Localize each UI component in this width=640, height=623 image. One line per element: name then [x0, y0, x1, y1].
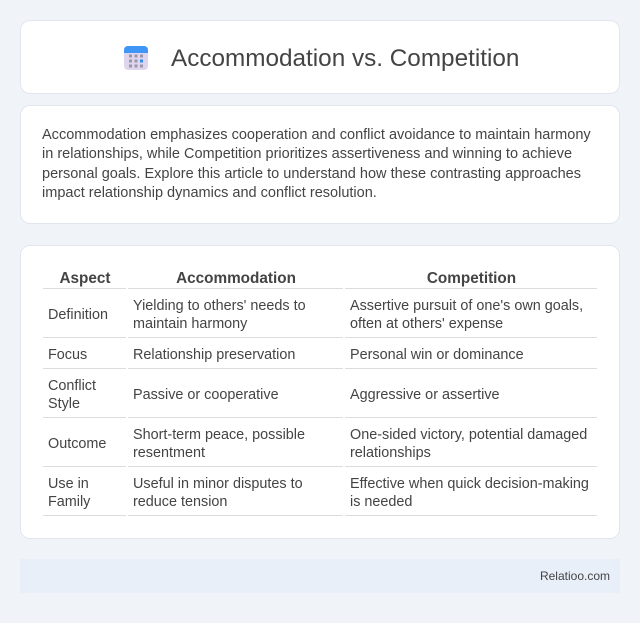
row: focus: [48, 347, 524, 363]
table header: Accommodation: [176, 270, 296, 287]
row: focus: Relationship preservation: [133, 347, 295, 363]
row: outcome: Short-term peace, possible: [133, 427, 305, 443]
row: use in family: Effective when quick decision-making: [350, 476, 589, 492]
panel: header: [20, 20, 620, 94]
footer brand: Relatioo.com: [540, 569, 610, 583]
row: outcome: One-sided victory, potential damaged: [350, 427, 587, 443]
intro text: personal goals. Explore this article to understand how these contrasting approaches: [42, 166, 581, 182]
row: outcome: resentment: [133, 445, 205, 461]
row: conflict style: Conflict: [48, 378, 96, 394]
intro text: in relationships, while Competition prioritizes assertiveness and winning to achieve: [42, 146, 572, 162]
icon: calendar: [124, 46, 148, 70]
row: definition: [48, 298, 583, 332]
table header: [59, 270, 516, 287]
row: use in family: [48, 476, 589, 510]
row: outcome: [48, 427, 587, 461]
intro text: [42, 127, 591, 201]
row: use in family: reduce tension: [133, 494, 227, 510]
row: definition: Assertive pursuit of one's own goals,: [350, 298, 583, 314]
row: conflict style: Passive or cooperative: [133, 387, 279, 403]
intro text: Accommodation emphasizes cooperation and conflict avoidance to maintain harmony: [42, 127, 591, 143]
row: conflict style: [48, 378, 500, 412]
row: outcome: Outcome: [48, 436, 106, 452]
row: definition: maintain harmony: [133, 316, 247, 332]
row: outcome: relationships: [350, 445, 431, 461]
row: use in family: Useful in minor disputes to: [133, 476, 303, 492]
panel: comparison table: [20, 245, 620, 539]
row: use in family: is needed: [350, 494, 412, 510]
table header: Competition: [427, 270, 516, 287]
footer bar: [20, 559, 620, 593]
intro text: impact relationship dynamics and conflict resolution.: [42, 185, 377, 201]
panel: intro: [20, 105, 620, 224]
row: use in family: Family: [48, 494, 90, 510]
row: focus: Focus: [48, 347, 87, 363]
row: conflict style: Aggressive or assertive: [350, 387, 500, 403]
title: Accommodation vs. Competition: [171, 45, 519, 72]
row: definition: Definition: [48, 307, 108, 323]
row: conflict style: Style: [48, 396, 80, 412]
row: definition: often at others' expense: [350, 316, 503, 332]
row: use in family: Use in: [48, 476, 89, 492]
row: definition: Yielding to others' needs to: [133, 298, 306, 314]
row: focus: Personal win or dominance: [350, 347, 524, 363]
table header: Aspect: [59, 270, 110, 287]
